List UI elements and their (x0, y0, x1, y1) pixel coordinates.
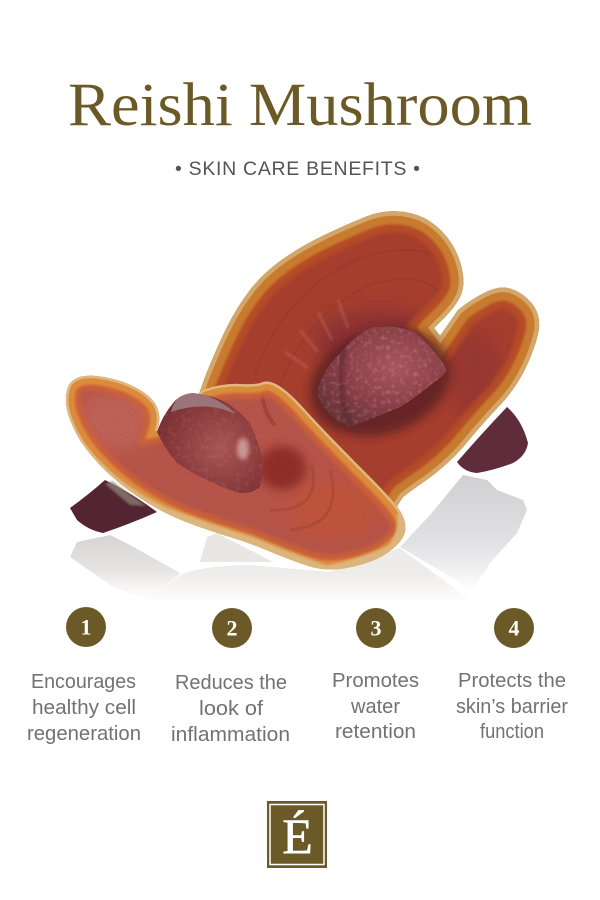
benefit 3 text: retention (335, 721, 416, 743)
number badge 3: 3 (370, 616, 382, 640)
benefit 2 text: look of (199, 698, 263, 720)
benefit 3 text (332, 670, 419, 743)
benefit 4 text: function (480, 721, 544, 743)
back knob shadow (295, 310, 465, 454)
benefit 2 text: Reduces the (175, 672, 287, 694)
rear stem (457, 407, 528, 473)
benefit 3 text: Promotes (332, 670, 419, 692)
fade to white (40, 572, 560, 604)
knob highlight (237, 438, 249, 460)
benefit 2 (171, 608, 290, 746)
front mushroom cap (60, 370, 410, 575)
benefit 2 text: inflammation (171, 724, 290, 746)
benefit 4 text (456, 670, 568, 743)
benefit 3 (332, 608, 419, 743)
benefit 2 text (171, 672, 290, 746)
benefit 4 (456, 608, 568, 743)
benefit 1 text: healthy cell (32, 697, 136, 719)
number badge 1: 1 (80, 614, 92, 640)
front mushroom knob (155, 390, 265, 495)
back mushroom stalk top (318, 326, 447, 427)
logo: É (282, 808, 313, 864)
mushroom photo illustration (66, 211, 540, 592)
benefit 1 text (27, 671, 141, 745)
title: Reishi Mushroom (68, 72, 532, 139)
benefit 1 text: Encourages (31, 671, 136, 693)
knob top sheen (171, 392, 236, 414)
back mushroom cap (199, 211, 540, 506)
benefit 3 text: water (350, 696, 400, 718)
benefit 1 (27, 607, 141, 745)
number badge 4: 4 (508, 616, 520, 640)
logo (267, 801, 327, 868)
benefit 4 text: skin’s barrier (456, 696, 568, 718)
table reflections (70, 475, 527, 600)
benefit 4 text: Protects the (458, 670, 566, 692)
subtitle: • SKIN CARE BENEFITS • (175, 158, 420, 180)
number badge 2: 2 (226, 616, 238, 640)
benefit 1 text: regeneration (27, 723, 141, 745)
front stem (70, 480, 157, 533)
stem grey patch (105, 481, 146, 506)
